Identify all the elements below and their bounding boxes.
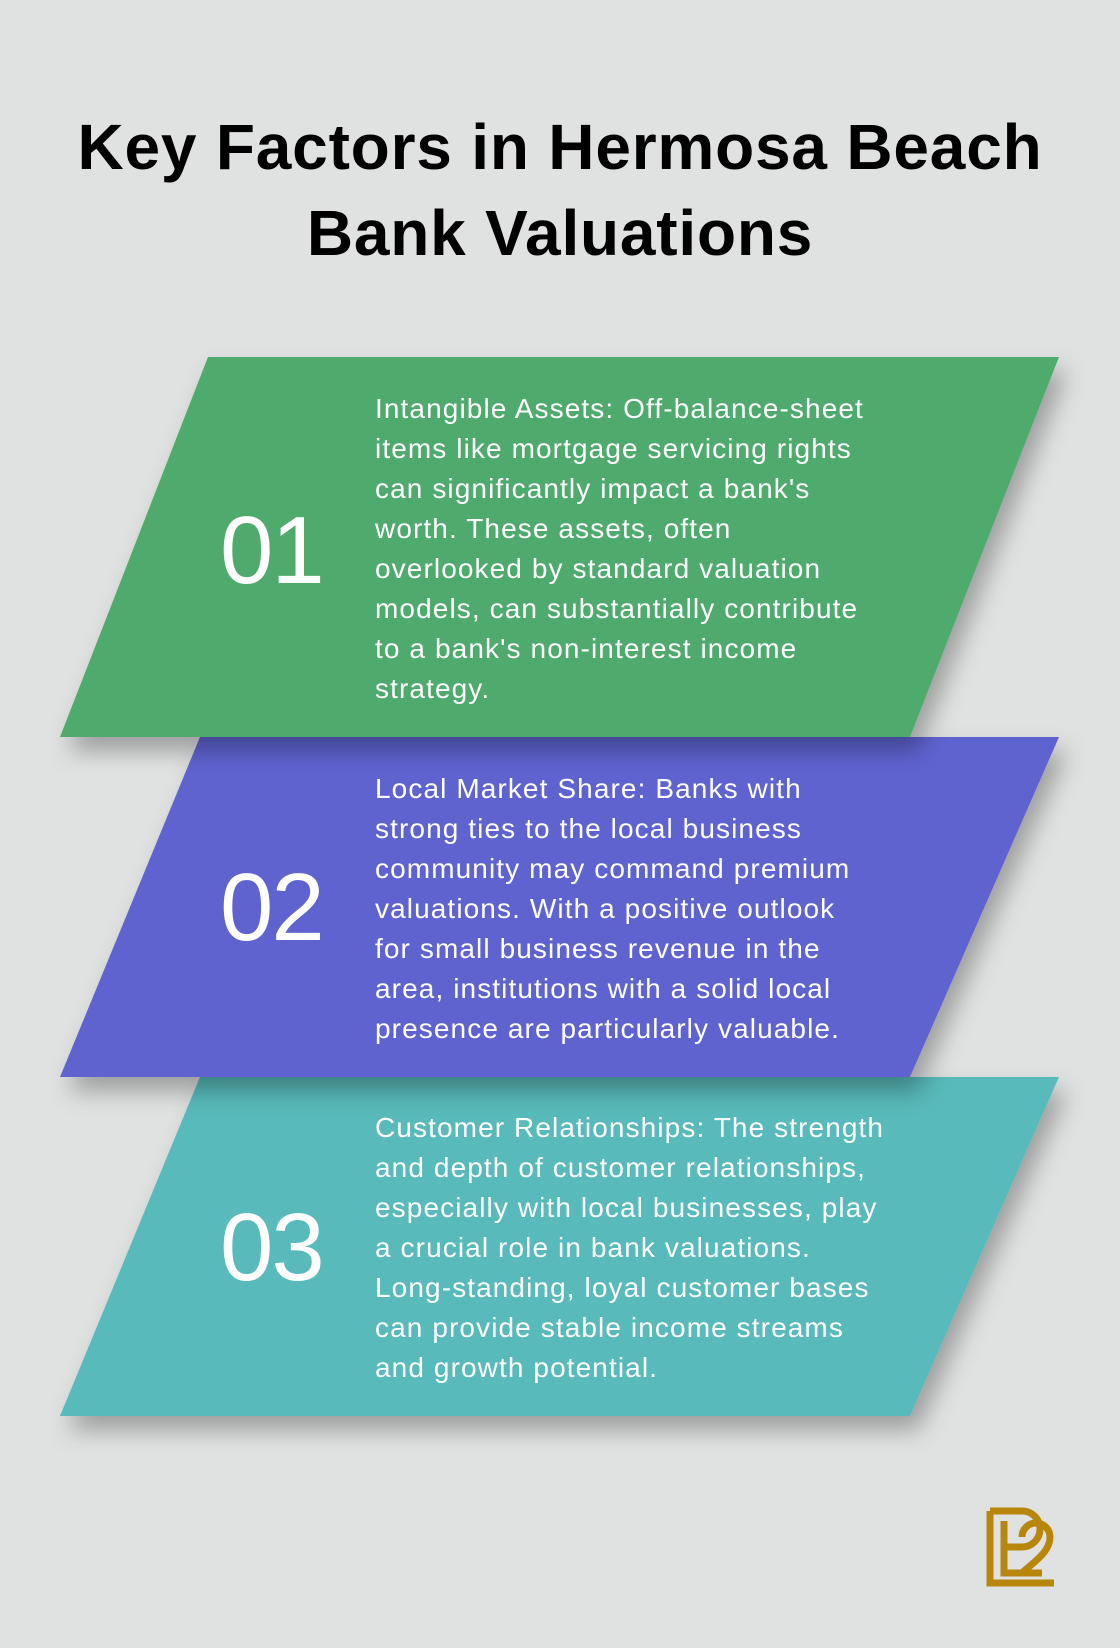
text 2: presence are particularly valuable. [375,1013,840,1044]
text 2: strong ties to the local business [375,813,802,844]
text 3: especially with local businesses, play [375,1192,877,1223]
text 2: valuations. With a positive outlook [375,893,835,924]
text 3: a crucial role in bank valuations. [375,1232,811,1263]
panel 3 shape [60,1077,1059,1416]
text 2: for small business revenue in the [375,933,821,964]
title [78,111,1042,269]
text 2: Local Market Share: Banks with [375,773,802,804]
text 2: community may command premium [375,853,850,884]
title: Key Factors in Hermosa Beach [78,111,1042,183]
text 3: can provide stable income streams [375,1312,844,1343]
text 3: and growth potential. [375,1352,658,1383]
panel 2 shape [60,737,1059,1077]
text 1: items like mortgage servicing rights [375,433,852,464]
text 2 [375,773,850,1044]
logo [986,1508,1054,1586]
number 01: 01 [220,497,323,604]
text 3: Long-standing, loyal customer bases [375,1272,870,1303]
text 1: Intangible Assets: Off-balance-sheet [375,393,864,424]
text 1: strategy. [375,673,490,704]
panel 1 shape [60,357,1059,737]
text 1: overlooked by standard valuation [375,553,821,584]
text 1: can significantly impact a bank's [375,473,810,504]
text 3: and depth of customer relationships, [375,1152,866,1183]
text 1: worth. These assets, often [375,513,731,544]
text 2: area, institutions with a solid local [375,973,831,1004]
number 03: 03 [220,1194,323,1301]
title: Bank Valuations [307,197,813,269]
text 1 [375,393,864,704]
text 1: to a bank's non-interest income [375,633,797,664]
text 3: Customer Relationships: The strength [375,1112,884,1143]
text 1: models, can substantially contribute [375,593,858,624]
text 3 [375,1112,884,1383]
number 02: 02 [220,854,323,961]
